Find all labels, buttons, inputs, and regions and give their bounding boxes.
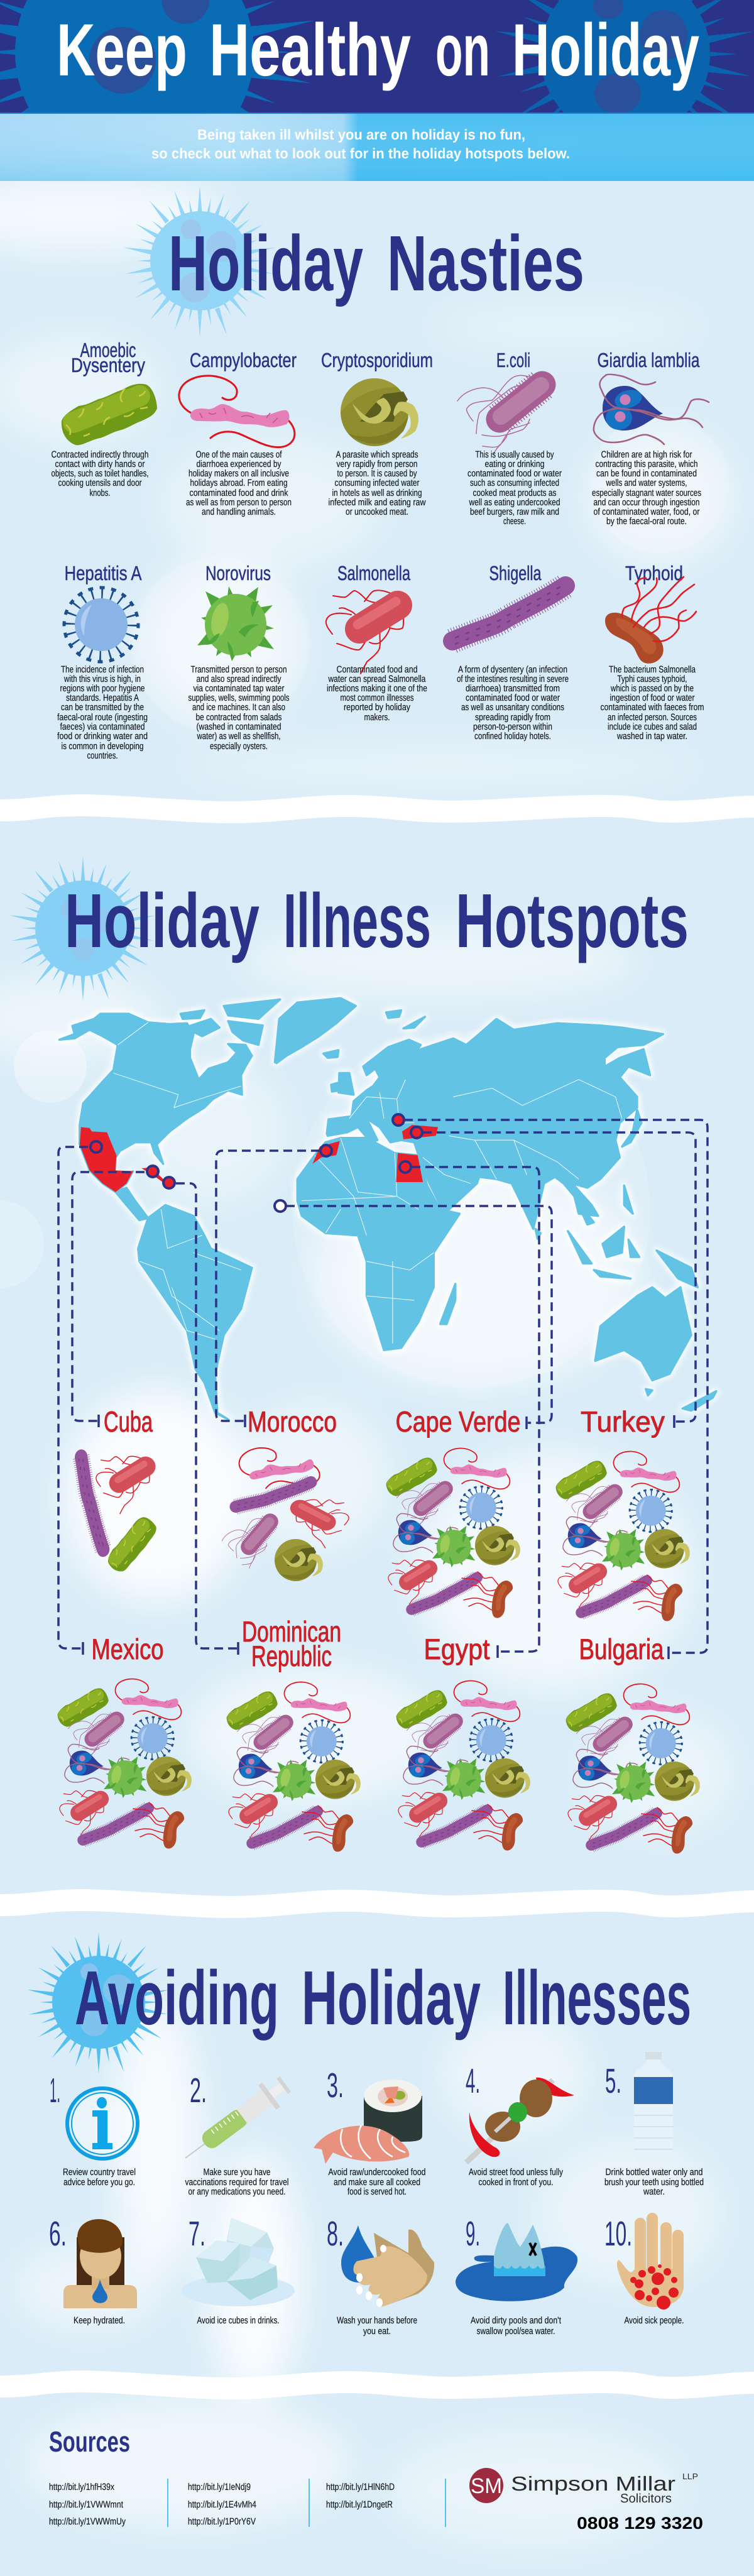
description: beef burgers, raw milk and <box>470 507 559 517</box>
description: person-to-person within <box>473 721 552 732</box>
icon: typhoid <box>605 577 696 664</box>
intro text: so check out what to look out for in the holiday hotspots below. <box>151 145 570 162</box>
description <box>457 664 569 742</box>
label: Turkey <box>581 1405 665 1438</box>
germ group <box>65 1456 167 1576</box>
description: A parasite which spreads <box>336 449 418 460</box>
country: Mexico <box>55 1633 192 1849</box>
description: diarrhoea experienced by <box>196 459 281 469</box>
description: Children are at high risk for <box>601 449 692 460</box>
caption: Make sure you have <box>204 2167 270 2178</box>
source links: http://bit.ly/1HlN6hD <box>326 2482 395 2492</box>
description: washed in tap water. <box>616 731 687 742</box>
caption <box>469 2167 563 2188</box>
icon: right germ <box>494 0 753 184</box>
source links: http://bit.ly/1P0rY6V <box>188 2516 256 2527</box>
description <box>601 664 704 742</box>
description: A form of dysentery (an infection <box>458 664 567 675</box>
description: especially oysters. <box>210 741 268 752</box>
icon: giardia <box>594 375 709 444</box>
description: very rapidly from person <box>337 459 417 469</box>
description: objects, such as toilet handles, <box>52 468 148 479</box>
icon: skewer <box>466 2078 574 2162</box>
panel: Amoebic Dysentery <box>52 339 157 498</box>
icon: hand with spots <box>617 2218 684 2310</box>
description: cooked meat products as <box>473 488 557 498</box>
highlighted countries <box>80 1125 438 1192</box>
tip 8: wash hands <box>327 2214 434 2337</box>
source links <box>49 2479 445 2527</box>
number: 5. <box>605 2061 621 2100</box>
description: standards. Hepatitis A <box>66 693 139 703</box>
description: as well as unsanitary conditions <box>461 702 564 713</box>
caption: Avoid raw/undercooked food <box>328 2167 426 2178</box>
icon: germ star <box>123 186 275 337</box>
name <box>71 339 145 376</box>
tip 5: bottled water <box>604 2052 704 2197</box>
caption <box>328 2167 426 2197</box>
tip 6: hydrated <box>49 2214 137 2326</box>
caption: Drink bottled water only and <box>606 2167 702 2178</box>
description: most common illnesses <box>341 693 413 703</box>
name: Amoebic <box>80 339 136 361</box>
icon: pool <box>456 2223 577 2301</box>
label <box>242 1615 341 1672</box>
icon: germ star <box>9 857 155 1001</box>
caption: and make sure all cooked <box>334 2177 420 2188</box>
logo: Simpson Millar Solicitors: Simpson Millar <box>511 2472 675 2495</box>
description: such as consuming infected <box>470 478 559 488</box>
panel: Norovirus <box>188 562 289 752</box>
logo: Simpson Millar Solicitors: Solicitors <box>620 2492 672 2506</box>
description: an infected person. Sources <box>608 712 697 723</box>
panel: E.coli <box>457 349 562 527</box>
description: water can spread Salmonella <box>328 674 426 684</box>
tip 2: vaccinations <box>177 2071 294 2197</box>
caption: cooked in front of you. <box>479 2177 553 2188</box>
description: makers. <box>364 712 390 723</box>
description <box>327 664 427 723</box>
caption: Keep hydrated. <box>74 2315 125 2326</box>
heading: Holiday Illness Hotspots <box>9 857 689 1001</box>
label: Dominican <box>242 1615 341 1648</box>
icon: amoeba <box>62 384 157 445</box>
caption: Avoid sick people. <box>625 2315 684 2326</box>
description: holiday makers on all inclusive <box>188 468 289 479</box>
germ group <box>383 1449 520 1618</box>
germ group <box>55 1679 192 1849</box>
description: and can occur through ingestion <box>593 497 700 508</box>
icon: sushi <box>314 2080 422 2164</box>
caption <box>604 2167 704 2197</box>
description: include ice cubes and salad <box>608 721 697 732</box>
description: This is usually caused by <box>475 449 554 460</box>
icon: woman with water drop <box>63 2219 137 2308</box>
description: holidays abroad. From eating <box>190 478 288 488</box>
intro text <box>151 126 570 162</box>
source links: http://bit.ly/1DngetR <box>326 2499 393 2510</box>
description: diarrhoea) transmitted from <box>466 683 560 694</box>
description: with this virus is high, in <box>63 674 141 684</box>
icon: germ star <box>27 1932 169 2073</box>
caption: advice before you go. <box>63 2177 135 2188</box>
logo: Simpson Millar Solicitors: LLP <box>682 2472 698 2481</box>
description: be contracted from salads <box>196 712 281 723</box>
tip 3: raw food <box>314 2066 426 2197</box>
number: 8. <box>327 2214 344 2253</box>
label: Egypt <box>423 1633 490 1665</box>
tip 9: dirty pools <box>456 2214 577 2337</box>
description <box>592 449 701 527</box>
panel: Hepatitis A <box>57 562 148 761</box>
panel: Salmonella <box>326 562 427 723</box>
description: Contracted indirectly through <box>52 449 148 460</box>
icon: norovirus <box>197 586 274 661</box>
description: The bacterium Salmonella <box>609 664 696 675</box>
description: contaminated food or water <box>466 693 560 703</box>
description: confined holiday hotels. <box>474 731 551 742</box>
caption: you eat. <box>363 2326 391 2337</box>
description: food or drinking water and <box>57 731 148 742</box>
description: contaminated food or water <box>467 468 562 479</box>
name: Cryptosporidium <box>321 349 433 371</box>
label: Republic <box>251 1640 332 1672</box>
country: Egypt <box>393 1633 530 1851</box>
description: which is passed on by the <box>610 683 694 694</box>
caption: swallow pool/sea water. <box>476 2326 555 2337</box>
icon: shigella <box>452 585 566 644</box>
description: cooking utensils and door <box>58 478 142 488</box>
logo: Simpson Millar Solicitors <box>469 2468 698 2506</box>
heading: Holiday Illness Hotspots: Holiday <box>65 878 260 963</box>
country: Morocco <box>219 1405 349 1581</box>
heading: Sources: Sources <box>49 2425 130 2458</box>
description: wells and water systems, <box>606 478 687 488</box>
caption: vaccinations required for travel <box>185 2177 289 2188</box>
heading: Holiday Nasties: Holiday <box>168 220 363 307</box>
description: faeces) via contaminated <box>60 721 145 732</box>
country: Dominican Republic <box>224 1615 361 1852</box>
description: supplies, wells, swimming pools <box>188 693 289 703</box>
icon: cryptosporidium <box>341 378 418 446</box>
description: of the intestines resulting in severe <box>457 674 569 684</box>
description: infected milk and eating raw <box>328 497 426 508</box>
description: contact with dirty hands or <box>55 459 145 469</box>
caption <box>63 2167 136 2188</box>
label: Cape Verde <box>396 1405 520 1438</box>
caption <box>337 2315 417 2337</box>
caption: Wash your hands before <box>337 2315 417 2326</box>
country: Cuba <box>65 1405 167 1576</box>
name: Campylobacter <box>190 349 297 371</box>
description: water) as well as shellfish, <box>197 731 280 742</box>
description: and handling animals. <box>202 507 276 517</box>
title: Healthy <box>209 9 411 92</box>
tip 4: street food <box>466 2061 574 2188</box>
logo: Simpson Millar Solicitors: SM <box>471 2474 502 2498</box>
description: by the faecal-oral route. <box>606 516 687 527</box>
description: The incidence of infection <box>61 664 144 675</box>
name: Dysentery <box>71 354 145 376</box>
map: world <box>0 998 716 1419</box>
description: (washed in contaminated <box>196 721 281 732</box>
heading: Avoiding Holiday Illnesses <box>27 1932 691 2073</box>
panel: Giardia lamblia <box>592 349 709 527</box>
label: Morocco <box>248 1405 337 1438</box>
description: is common in developing <box>62 741 143 752</box>
icon: hepatitis virus <box>64 588 138 662</box>
country: Turkey <box>553 1405 690 1621</box>
germ group <box>393 1681 530 1851</box>
name: Shigella <box>489 562 542 584</box>
country: Bulgaria <box>563 1633 700 1854</box>
description: to person. It is caused by <box>337 468 417 479</box>
number: 7. <box>188 2214 205 2253</box>
description: or uncooked meat. <box>346 507 408 517</box>
heading: Holiday Nasties <box>123 186 584 337</box>
panel: Campylobacter <box>179 349 297 517</box>
name: Norovirus <box>205 562 271 584</box>
number: 3. <box>327 2066 344 2105</box>
description: knobs. <box>89 488 111 498</box>
header banner <box>0 0 754 235</box>
description: eating or drinking <box>485 459 544 469</box>
description <box>186 449 292 517</box>
panel: Shigella <box>452 562 569 742</box>
number: 6. <box>49 2214 67 2253</box>
name: Typhoid <box>625 562 683 584</box>
caption: Avoid street food unless fully <box>469 2167 563 2178</box>
description <box>188 664 289 752</box>
name: Salmonella <box>337 562 410 584</box>
caption: or any medications you need. <box>188 2186 285 2197</box>
number: 9. <box>466 2214 480 2253</box>
title: on <box>435 9 490 92</box>
panel: Cryptosporidium <box>321 349 433 517</box>
heading: Holiday Nasties: Nasties <box>387 220 584 307</box>
description <box>467 449 562 527</box>
caption: Avoid ice cubes in drinks. <box>197 2315 279 2326</box>
country: Cape Verde <box>383 1405 520 1618</box>
description <box>57 664 148 761</box>
description: can be transmitted by the <box>61 702 144 713</box>
heading: Avoiding Holiday Illnesses: Holiday <box>302 1955 481 2041</box>
tip 1: travel advice: 1. <box>50 2071 60 2110</box>
label: Bulgaria <box>579 1633 664 1665</box>
source links: http://bit.ly/1VWWmnt <box>49 2499 124 2510</box>
description: Contaminated food and <box>337 664 417 675</box>
icon: hand and water drop <box>341 2225 434 2307</box>
caption: brush your teeth using bottled <box>604 2177 704 2188</box>
name: Hepatitis A <box>64 562 142 584</box>
caption: Review country travel <box>63 2167 136 2178</box>
description: ingestion of food or water <box>609 693 695 703</box>
icon: salmonella <box>326 590 404 674</box>
description: via contaminated tap water <box>194 683 284 694</box>
description: consuming infected water <box>334 478 420 488</box>
source links: http://bit.ly/1VWWmUy <box>49 2516 126 2527</box>
number: 4. <box>466 2061 480 2100</box>
number: 2. <box>190 2071 207 2110</box>
heading: Avoiding Holiday Illnesses: Avoiding <box>75 1955 279 2041</box>
description: Transmitted person to person <box>191 664 287 675</box>
germ group <box>563 1684 700 1854</box>
description: reported by holiday <box>344 702 410 713</box>
description: as well as from person to person <box>186 497 292 508</box>
source links: http://bit.ly/1hfH39x <box>49 2482 114 2492</box>
caption <box>471 2315 562 2337</box>
description: regions with poor hygiene <box>60 683 145 694</box>
caption: Avoid dirty pools and don't <box>471 2315 562 2326</box>
heading: Holiday Illness Hotspots: Illness <box>283 878 431 963</box>
source links: http://bit.ly/1E4vMh4 <box>188 2499 256 2510</box>
icon: e. coli <box>457 375 542 454</box>
icon: water bottle <box>634 2052 673 2162</box>
tip 10: sick people <box>604 2214 684 2326</box>
description <box>52 449 148 498</box>
description: cheese. <box>503 516 526 527</box>
description: spreading rapidly from <box>475 712 550 723</box>
germ group <box>224 1682 361 1852</box>
germ group <box>553 1452 690 1621</box>
name: E.coli <box>496 349 530 371</box>
caption <box>185 2167 289 2197</box>
phone number: 0808 129 3320 <box>577 2514 703 2533</box>
tip 1: travel advice <box>50 2071 138 2188</box>
description: especially stagnant water sources <box>592 488 701 498</box>
description: in hotels as well as drinking <box>332 488 422 498</box>
description: Typhi causes typhoid, <box>617 674 687 684</box>
label: Cuba <box>104 1405 153 1438</box>
caption: water. <box>643 2186 665 2197</box>
description: countries. <box>87 750 118 761</box>
description: contaminated food and drink <box>190 488 288 498</box>
description: and also spread indirectly <box>196 674 281 684</box>
description: of contaminated water, food, or <box>593 507 700 517</box>
label: Mexico <box>92 1633 163 1665</box>
intro text: Being taken ill whilst you are on holiday is no fun, <box>197 126 525 143</box>
icon: campylobacter <box>179 376 295 447</box>
panel: Typhoid <box>601 562 704 742</box>
map location markers <box>90 1114 422 1212</box>
description: well as eating undercooked <box>469 497 560 508</box>
description: contracting this parasite, which <box>596 459 697 469</box>
caption: food is served hot. <box>347 2186 407 2197</box>
description: infections making it one of the <box>327 683 427 694</box>
germ group <box>219 1436 349 1581</box>
description: One of the main causes of <box>196 449 282 460</box>
description: and ice machines. It can also <box>192 702 285 713</box>
title: Keep <box>57 9 187 92</box>
description: can be found in contaminated <box>596 468 697 479</box>
intro band <box>0 112 754 181</box>
dashed connector lines <box>58 1120 708 1659</box>
icon: ice cubes <box>182 2218 295 2306</box>
source links: http://bit.ly/1IeNdj9 <box>188 2482 251 2492</box>
icon: syringe <box>177 2072 294 2170</box>
name: Giardia lamblia <box>597 349 700 371</box>
description <box>328 449 426 517</box>
icon: left germ <box>0 0 315 235</box>
title <box>57 9 699 92</box>
icon: info <box>67 2088 138 2159</box>
number: 10. <box>604 2214 632 2253</box>
description: faecal-oral route (ingesting <box>57 712 148 723</box>
tip 7: ice cubes <box>182 2214 295 2326</box>
description: contaminated with faeces from <box>601 702 704 713</box>
